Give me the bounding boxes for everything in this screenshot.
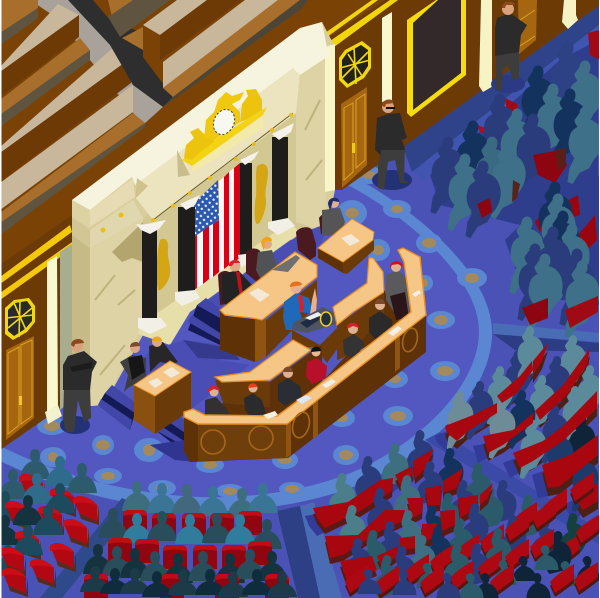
American flag (194, 163, 240, 290)
front desk (184, 248, 426, 462)
red bun woman (343, 323, 375, 358)
desk rings (201, 327, 420, 454)
columns (136, 123, 295, 334)
audience: right middle (505, 175, 600, 338)
red hair woman, right arm (386, 261, 410, 320)
small desk: left (134, 361, 191, 434)
central carpet (0, 0, 479, 497)
balcony: upper gallery (0, 0, 400, 300)
desk papers (263, 290, 421, 419)
right wall (325, 0, 600, 190)
carpet border arc (0, 0, 492, 511)
red bun woman, left (205, 386, 230, 417)
gold clock sculpture (177, 89, 267, 177)
guard: upper right (491, 2, 527, 93)
lectern (292, 307, 340, 363)
rostrum back wall (72, 22, 335, 406)
door (6, 336, 34, 440)
cream entablature (72, 22, 330, 248)
chairs (218, 214, 329, 305)
gold ornaments (157, 239, 170, 290)
carpet medallions (37, 166, 487, 498)
icon: octagonal window (339, 41, 371, 88)
guard: centre (372, 99, 412, 190)
seated person: dark haired woman (322, 198, 345, 236)
brown haired man (369, 299, 393, 340)
man in suit (278, 367, 302, 406)
small desk: right (318, 219, 374, 274)
guard: left (60, 339, 97, 434)
seated person: blonde woman (256, 237, 278, 282)
upper left desk panel (218, 198, 345, 362)
beige base (138, 222, 300, 345)
icon: octagonal window (5, 298, 35, 340)
woman in red coat (306, 347, 327, 384)
left wall with door (0, 215, 75, 450)
picture frame (407, 0, 466, 117)
audience: bottom centre rows (80, 481, 297, 598)
dais steps (98, 222, 330, 462)
audience: bottom left (0, 449, 99, 597)
audience: right rows (435, 326, 600, 520)
seated officials: front desk (205, 261, 410, 417)
red hair man (244, 383, 266, 416)
seated officials: left desk (120, 336, 178, 392)
audience: upper right (430, 30, 600, 238)
desk (220, 252, 317, 362)
door (518, 0, 537, 54)
front desk well (203, 290, 400, 417)
door (341, 87, 367, 188)
audience: lower right (305, 430, 600, 598)
speaker at rostrum (283, 281, 317, 330)
seated person: red hair man (222, 260, 252, 310)
middle desk (215, 258, 384, 410)
